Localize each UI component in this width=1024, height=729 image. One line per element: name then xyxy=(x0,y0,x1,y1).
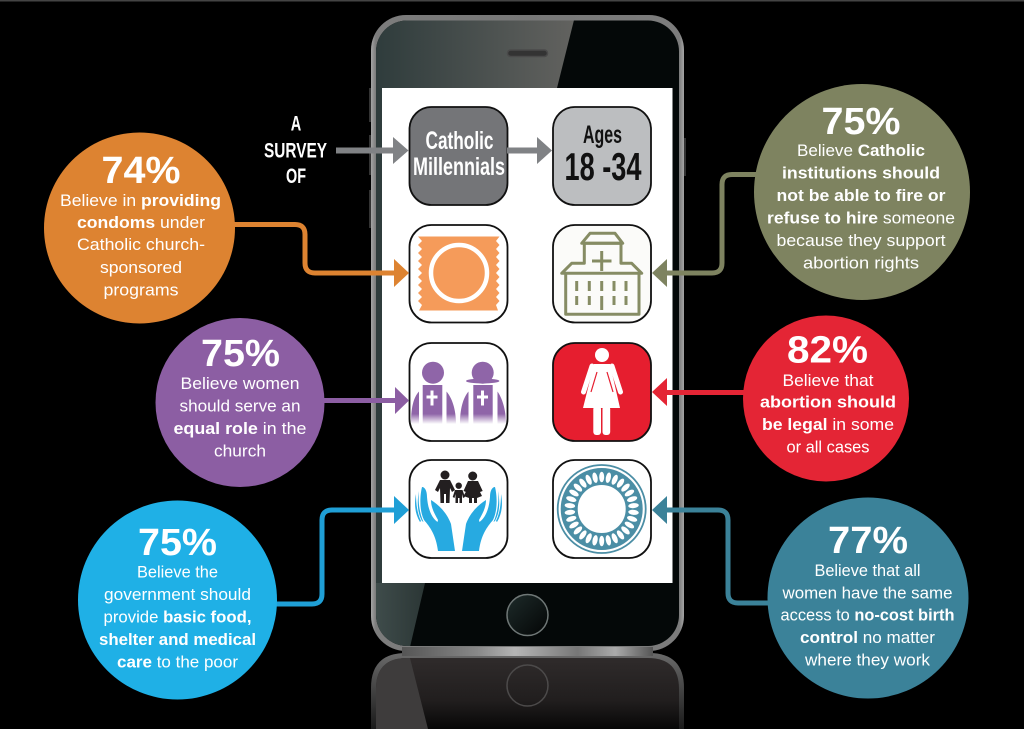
callout: 75% institutions: refuse to hire someone xyxy=(767,208,955,228)
callout: 75% women equal role: Believe women xyxy=(180,374,300,393)
callout: 75% basic food: 75% xyxy=(138,522,217,564)
icon: family in hands xyxy=(410,460,508,558)
survey label: A xyxy=(291,112,301,136)
arrow: millennials to ages xyxy=(507,137,552,164)
callout: 75% basic food: Believe the xyxy=(137,562,218,582)
callout: 75% women equal role: should serve an xyxy=(180,396,300,416)
callout: 74% condoms: condoms under xyxy=(77,213,205,232)
connector: birth control xyxy=(652,496,770,603)
connector: abortion xyxy=(652,378,745,406)
glass strip left xyxy=(376,88,382,584)
callout: 82% abortion: 82% xyxy=(787,330,868,372)
callout: 75% institutions: 75% xyxy=(822,101,900,143)
callout: 75% basic food xyxy=(78,500,277,700)
icon: clergy women xyxy=(410,343,508,441)
icon: catholic millennials: Catholic xyxy=(426,127,494,155)
callout: 75% institutions: abortion rights xyxy=(803,254,919,272)
callout: 75% institutions: Believe Catholic xyxy=(797,141,925,160)
connector: poor xyxy=(275,496,409,604)
phone reflection xyxy=(371,653,684,729)
callout: 74% condoms xyxy=(44,132,235,324)
icon: catholic institution building xyxy=(553,225,651,322)
callout: 77% birth control: where they work xyxy=(804,650,930,670)
callout: 82% abortion: abortion should xyxy=(760,392,896,412)
callout: 75% women equal role xyxy=(156,318,324,487)
callout: 75% basic food: provide basic food, xyxy=(104,608,251,626)
callout: 74% condoms: 74% xyxy=(102,150,180,192)
callout: 74% condoms: Believe in providing xyxy=(60,191,221,210)
home button xyxy=(507,594,548,636)
survey label: SURVEY xyxy=(264,140,327,162)
callout: 77% birth control: women have the same xyxy=(782,584,952,602)
callout: 75% institutions: not be able to fire or xyxy=(776,186,946,205)
glass highlight bottom xyxy=(376,583,425,647)
survey label xyxy=(264,112,327,188)
icon: catholic millennials: Millennials xyxy=(413,153,505,181)
icon: catholic millennials xyxy=(410,107,508,205)
callout: 74% condoms: sponsored xyxy=(100,258,182,277)
callout: 75% women equal role: church xyxy=(214,442,266,460)
callout: 82% abortion xyxy=(743,316,909,482)
icon: ages 18-34: Ages xyxy=(583,121,622,149)
callout: 77% birth control: control no matter xyxy=(800,628,935,647)
icon: condom xyxy=(410,225,508,322)
left hand xyxy=(415,487,455,551)
arrow: survey to millennials xyxy=(336,137,408,164)
callout: 75% basic food: government should xyxy=(104,585,251,604)
callout: 74% condoms: programs xyxy=(104,280,178,300)
icon: ages 18-34 xyxy=(553,107,651,205)
survey label: OF xyxy=(286,165,306,188)
icon: birth control pills xyxy=(553,460,651,558)
callout: 75% women equal role: 75% xyxy=(201,333,280,375)
callout: 75% women equal role: equal role in the xyxy=(174,419,306,438)
callout: 74% condoms: Catholic church- xyxy=(77,235,205,254)
callout: 75% institutions xyxy=(754,84,970,300)
callout: 75% institutions: because they support xyxy=(776,231,946,250)
callout: 75% basic food: care to the poor xyxy=(117,652,238,672)
right hand xyxy=(462,487,502,551)
callout: 82% abortion: be legal in some xyxy=(762,415,894,434)
bottom edge xyxy=(402,647,653,656)
icon: ages 18-34: 18 -34 xyxy=(564,146,642,189)
callout: 75% basic food: shelter and medical xyxy=(99,630,256,649)
connector: condoms xyxy=(232,224,409,287)
screen xyxy=(382,88,672,583)
icon: woman xyxy=(553,343,651,441)
glass highlight top xyxy=(376,20,574,88)
connector: women clergy xyxy=(322,387,409,414)
callout: 82% abortion: Believe that xyxy=(782,371,874,390)
callout: 77% birth control xyxy=(768,498,968,698)
callout: 77% birth control: access to no-cost birth xyxy=(780,606,954,624)
speaker xyxy=(508,50,548,56)
connector: institutions xyxy=(652,174,756,287)
callout: 77% birth control: 77% xyxy=(828,520,908,562)
phone xyxy=(369,15,686,656)
callout: 75% institutions: institutions should xyxy=(782,164,940,182)
callout: 77% birth control: Believe that all xyxy=(814,561,920,580)
callout: 82% abortion: or all cases xyxy=(786,438,870,456)
